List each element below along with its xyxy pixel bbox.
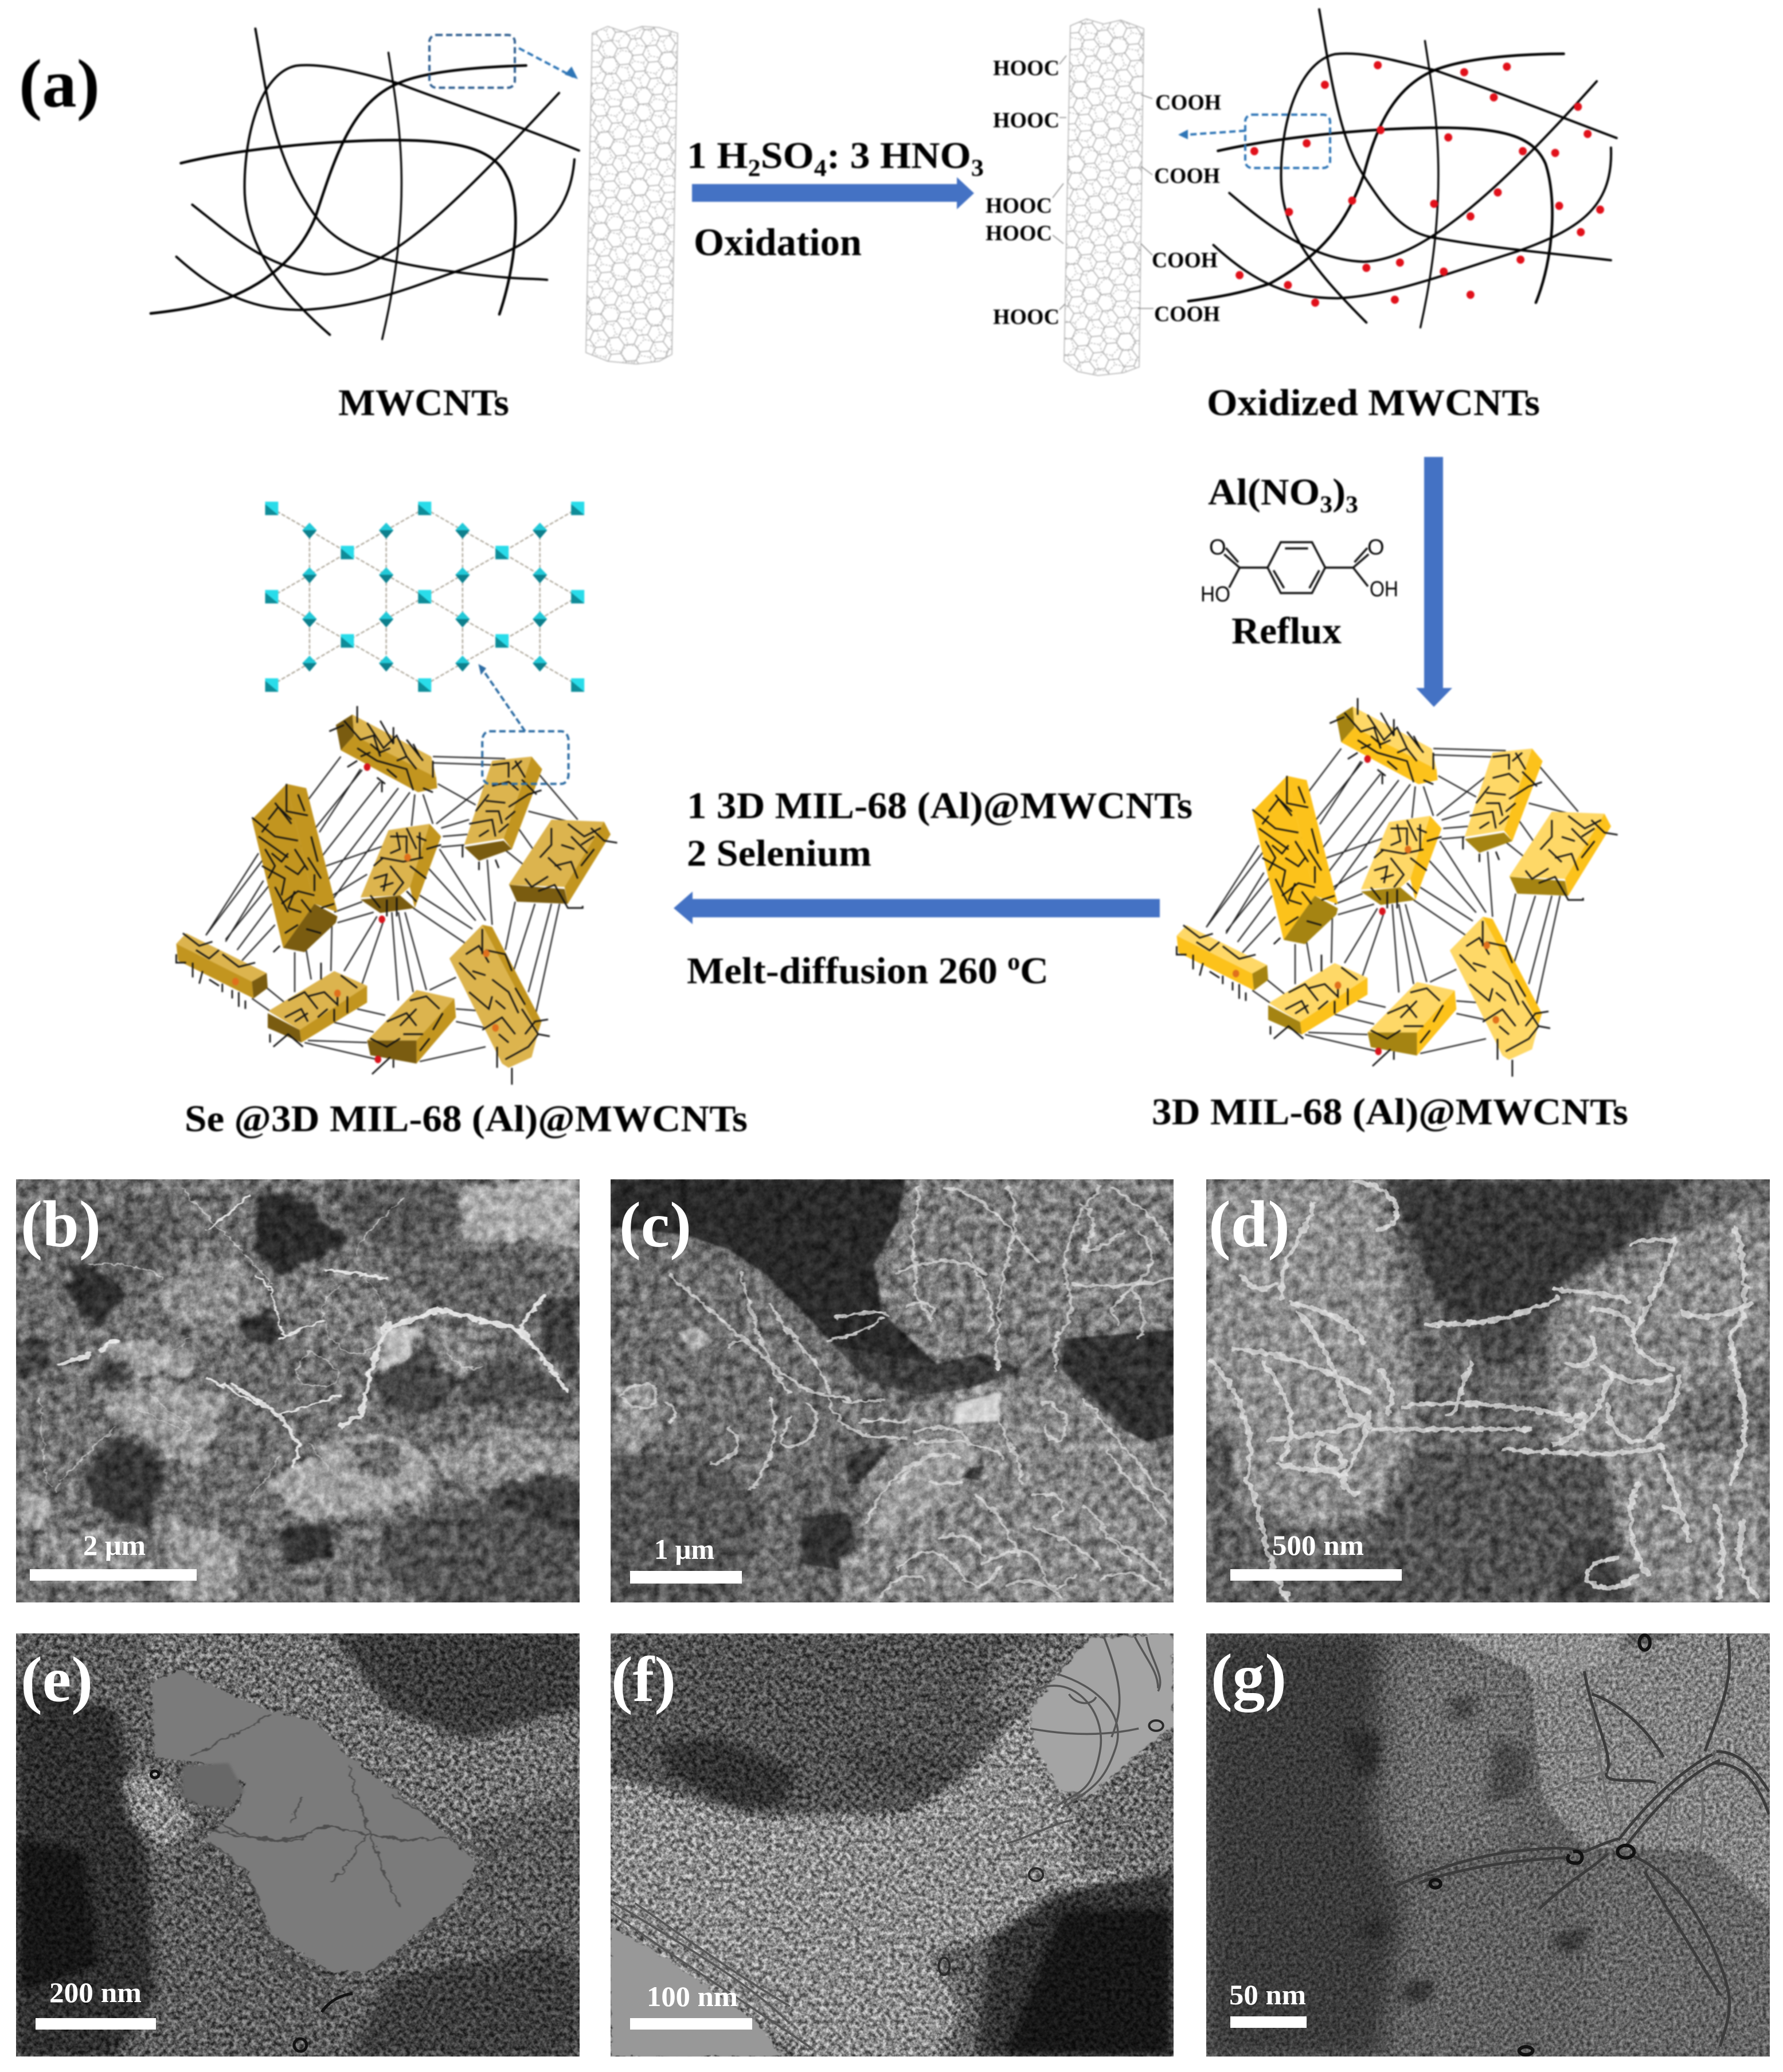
MWCNT network — [151, 29, 579, 339]
oxidation label: Oxidation — [694, 220, 862, 264]
carboxyl labels: COOH — [1154, 164, 1220, 188]
MWCNTs label: MWCNTs — [338, 382, 509, 424]
icon: terephthalic acid structure — [1201, 535, 1398, 607]
panel label f: (f) — [611, 1644, 676, 1715]
MOF lattice — [265, 502, 584, 692]
scale bar d — [1230, 1569, 1402, 1581]
reagent text: melt diffusion inputs: o — [1007, 949, 1020, 975]
panel label a: (a) — [19, 45, 100, 122]
panel b: SEM micrograph — [16, 1179, 580, 1602]
reagent text: melt diffusion inputs: Melt-diffusion 260 — [687, 950, 984, 992]
oxidized nanotube — [1053, 19, 1154, 376]
scale bar g — [1230, 2016, 1307, 2028]
carboxyl labels: COOH — [1155, 91, 1221, 115]
reagent label: 4 — [814, 155, 827, 182]
panel: a, synthesis scheme — [19, 9, 1628, 1140]
icon: terephthalic acid structure: OH — [1370, 577, 1398, 601]
arrow: reflux step — [1416, 457, 1452, 707]
reagent label: 2 — [748, 155, 761, 182]
carboxyl labels: HOOC — [993, 305, 1059, 329]
panel label b: (b) — [21, 1188, 101, 1261]
selection box and dashed arrow on oxidized MWCNTs — [1178, 115, 1330, 168]
scale label c: 1 μm — [654, 1533, 714, 1565]
aluminium nitrate label: ) — [1332, 471, 1346, 513]
oxidized MWCNTs label: Oxidized MWCNTs — [1207, 382, 1540, 424]
red functional-group dots — [1235, 61, 1604, 307]
carboxyl labels — [986, 56, 1221, 329]
selection box and dashed arrow on MWCNTs — [429, 35, 578, 88]
icon: terephthalic acid structure: HO — [1201, 582, 1230, 607]
carboxyl labels: HOOC — [986, 221, 1052, 245]
3D MIL-68 crystals on nanotubes — [1176, 698, 1618, 1077]
selection box and dashed arrow on lattice — [478, 664, 569, 784]
scale label d: 500 nm — [1272, 1529, 1364, 1561]
panel g: TEM micrograph — [1206, 1633, 1770, 2057]
scale label b: 2 μm — [83, 1529, 146, 1561]
Se loaded crystals on nanotubes — [176, 706, 617, 1085]
carboxyl labels: HOOC — [993, 56, 1059, 80]
scale label f: 100 nm — [647, 1980, 738, 2012]
panel e: TEM micrograph — [16, 1633, 580, 2057]
panel label c: (c) — [619, 1190, 691, 1261]
Se MIL-68 label: Se @3D MIL-68 (Al)@MWCNTs — [185, 1098, 748, 1140]
arrow: melt diffusion — [674, 892, 1160, 924]
reagent text: melt diffusion inputs: 1 3D MIL-68 (Al)@MWCNTs — [687, 785, 1192, 827]
3D MIL-68 label: 3D MIL-68 (Al)@MWCNTs — [1152, 1091, 1628, 1133]
aluminium nitrate label: 3 — [1320, 492, 1332, 518]
scale bar c — [630, 1571, 742, 1584]
reagent text: melt diffusion inputs: 2 Selenium — [687, 832, 871, 874]
reagent label: SO — [761, 135, 814, 177]
carboxyl labels: HOOC — [986, 194, 1052, 218]
aluminium nitrate label: 3 — [1346, 492, 1358, 518]
reagent text: melt diffusion inputs: C — [1020, 950, 1049, 992]
reagent label: : 3 HNO — [827, 135, 971, 177]
panel label g: (g) — [1211, 1641, 1287, 1713]
diamond nodes — [302, 523, 547, 671]
carboxyl labels: HOOC — [993, 108, 1059, 132]
reflux label: Reflux — [1231, 610, 1342, 652]
scale label e: 200 nm — [49, 1976, 142, 2008]
arrow: oxidation — [692, 177, 974, 209]
scale bar b — [30, 1569, 197, 1581]
panel label d: (d) — [1209, 1188, 1290, 1261]
panel d: SEM micrograph — [1206, 1179, 1770, 1602]
scale bar e — [36, 2018, 156, 2030]
scale bar f — [630, 2018, 752, 2030]
aluminium nitrate label: Al(NO — [1208, 471, 1315, 513]
icon: terephthalic acid structure: O — [1209, 535, 1226, 560]
panel c: SEM micrograph — [611, 1179, 1174, 1602]
square nodes — [265, 502, 584, 692]
reagent label: 3 — [971, 155, 984, 182]
panel f: TEM micrograph — [611, 1633, 1174, 2057]
icon: terephthalic acid structure: O — [1367, 535, 1385, 560]
panel label e: (e) — [21, 1644, 93, 1715]
reagent text: melt diffusion inputs — [687, 785, 1192, 992]
nanotube — [586, 26, 678, 364]
carboxyl labels: COOH — [1154, 302, 1220, 326]
scale label g: 50 nm — [1229, 1979, 1306, 2011]
carboxyl labels: COOH — [1152, 248, 1218, 272]
reagent label: 1 H — [687, 135, 745, 177]
oxidized MWCNT network — [1188, 9, 1617, 327]
